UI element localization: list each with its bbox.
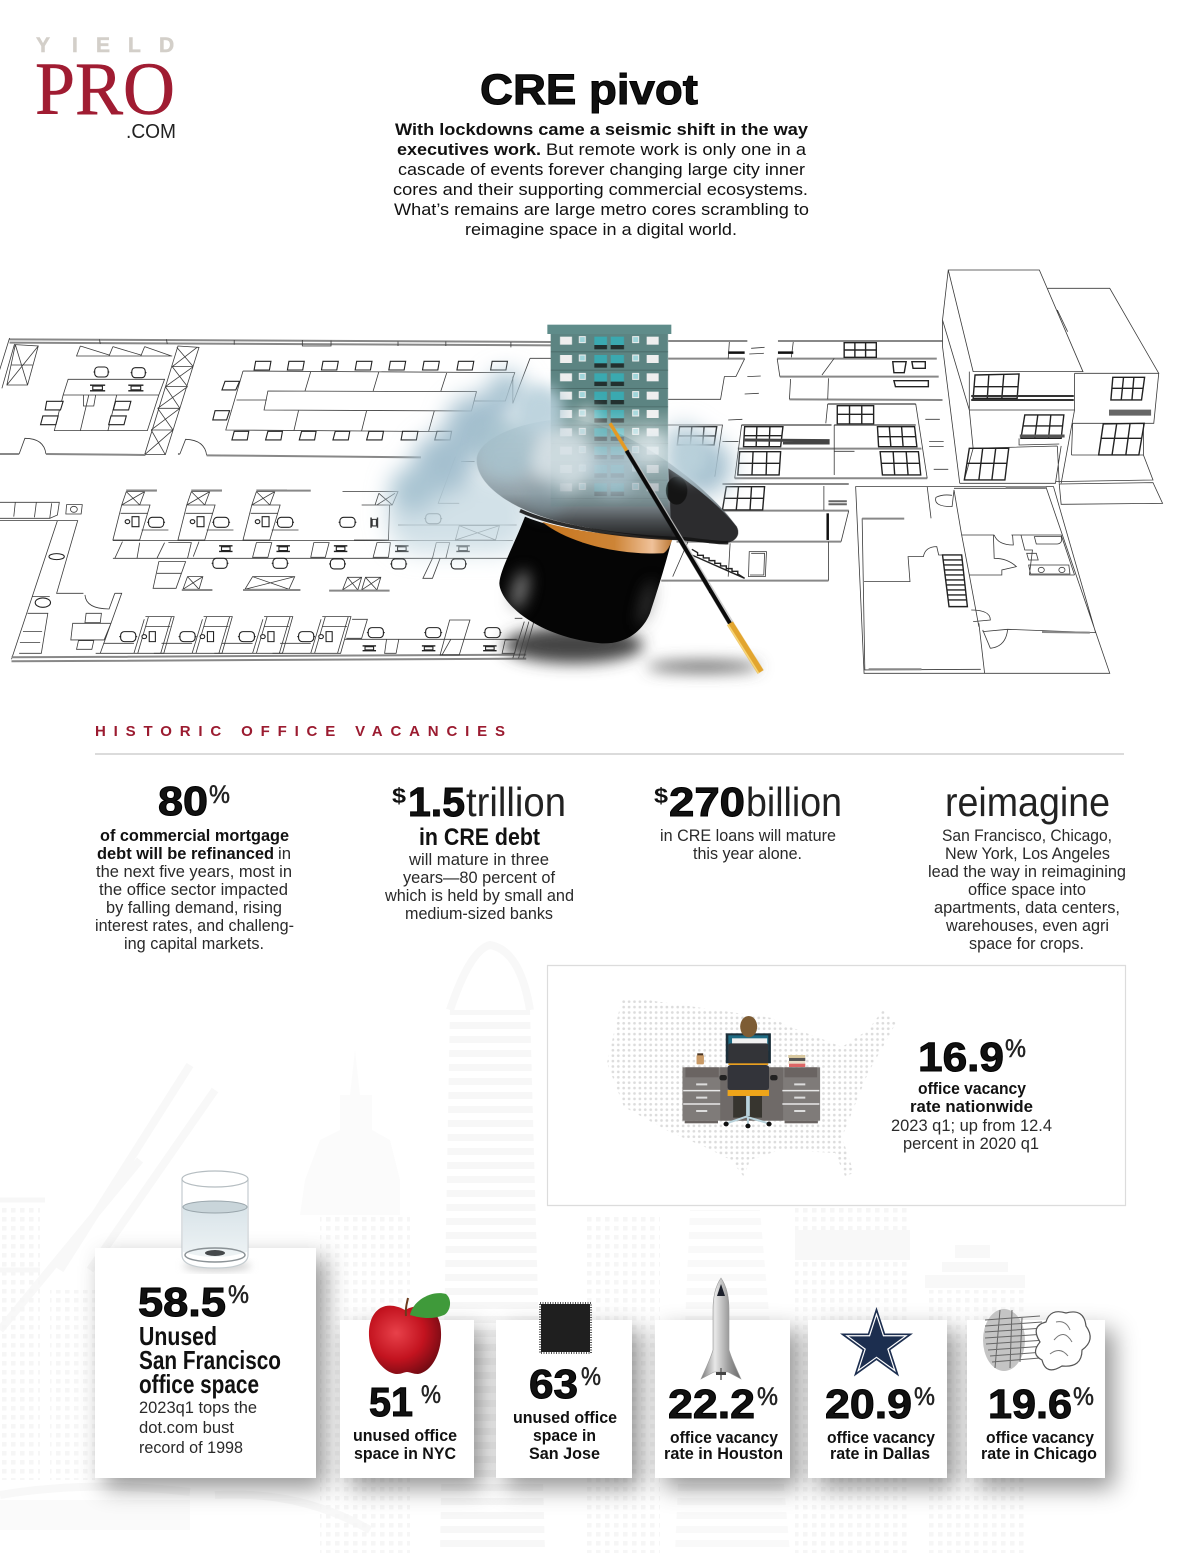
- card: San Francisco: office space: [139, 1369, 259, 1399]
- stat: $1.5 trillion: [384, 779, 574, 923]
- card: San Jose: [496, 1303, 632, 1478]
- stat: reimagine: office space into: [968, 880, 1086, 899]
- stat: reimagine: warehouses, even agri: [945, 916, 1109, 935]
- panel: national vacancy: [548, 966, 1126, 1206]
- card: Dallas: 20.9: [825, 1381, 912, 1427]
- lower office: [0, 502, 59, 518]
- stat: 80%: %: [209, 781, 230, 809]
- card: San Francisco: dot.com bust: [139, 1418, 234, 1437]
- building: [547, 325, 671, 507]
- card: Chicago: 19.6: [988, 1381, 1072, 1427]
- card: San Jose: 63: [529, 1361, 578, 1407]
- stat: $1.5 trillion: 1.5: [408, 779, 465, 825]
- card: Dallas: rate in Dallas: [830, 1444, 930, 1463]
- card: San Jose: San Jose: [529, 1444, 600, 1463]
- card: Houston: %: [757, 1383, 778, 1411]
- section heading: HISTORIC OFFICE VACANCIES: [95, 723, 505, 740]
- hat body: [499, 517, 673, 643]
- national figure: [891, 1034, 1052, 1153]
- card: San Francisco: record of 1998: [139, 1438, 243, 1457]
- title: CRE pivot: [480, 66, 698, 114]
- card: San Francisco: Unused: [139, 1321, 217, 1351]
- card: NYC: space in NYC: [354, 1444, 456, 1463]
- stat: $270 billion: 270: [669, 779, 745, 825]
- stat: 80%: ing capital markets.: [124, 934, 264, 953]
- stat: 80%: the next five years, most in: [96, 862, 292, 881]
- stat: $1.5 trillion: in CRE debt: [419, 824, 540, 851]
- card: San Jose: unused office: [513, 1408, 617, 1427]
- stat: 80%: in: [278, 844, 291, 863]
- illustration: magic hat: [387, 325, 761, 673]
- icon: microchip: [540, 1303, 591, 1353]
- logo: [35, 34, 176, 143]
- logo: PRO: PRO: [35, 48, 175, 131]
- card: San Jose: space in: [533, 1426, 596, 1445]
- hat ground shadows: [503, 627, 760, 672]
- card: NYC: [340, 1293, 474, 1478]
- floor plan: right house: [661, 270, 1163, 673]
- card: Chicago: [967, 1309, 1105, 1478]
- icon: star: [840, 1307, 913, 1376]
- card: Chicago: %: [1073, 1383, 1094, 1411]
- stat: $270 billion: in CRE loans will mature: [660, 826, 836, 845]
- icon: water glass: [182, 1171, 251, 1271]
- intro text: cores and their supporting commercial ecosystems.: [393, 181, 808, 199]
- intro text: cascade of events forever changing large city inner: [398, 161, 806, 179]
- rear cloud: [387, 372, 732, 553]
- national figure: %: [1005, 1035, 1026, 1063]
- intro text: [393, 121, 809, 239]
- icon: person at desk: [682, 1016, 820, 1128]
- stat: $270 billion: [654, 779, 842, 863]
- stat: reimagine: reimagine: [945, 779, 1110, 825]
- smoke: [477, 385, 710, 517]
- stat: $270 billion: this year alone.: [693, 844, 802, 863]
- card: San Francisco: [95, 1171, 316, 1478]
- stat: 80%: interest rates, and challeng-: [95, 916, 294, 935]
- wand: [610, 423, 761, 673]
- card: Chicago: rate in Chicago: [981, 1444, 1097, 1463]
- stat: 80%: of commercial mortgage: [100, 826, 289, 845]
- stat: $1.5 trillion: trillion: [466, 779, 566, 825]
- card: San Francisco: 2023q1 tops the: [139, 1398, 257, 1417]
- stat: $1.5 trillion: medium-sized banks: [405, 904, 553, 923]
- hat brim: [477, 419, 738, 543]
- card: Houston: office vacancy: [670, 1428, 778, 1447]
- logo: YIELD: YIELD: [36, 34, 174, 57]
- stat: reimagine: space for crops.: [969, 934, 1084, 953]
- stat: $270 billion: billion: [746, 779, 842, 825]
- icon: apple: [369, 1293, 450, 1374]
- hat band: [542, 522, 673, 554]
- brim lower edge: [520, 511, 728, 543]
- card: San Francisco: %: [228, 1281, 249, 1309]
- stat: $1.5 trillion: which is held by small and: [384, 886, 574, 905]
- national figure: office vacancy: [918, 1079, 1026, 1098]
- icon: wind face: [983, 1309, 1090, 1371]
- card: Houston: rate in Houston: [664, 1444, 783, 1463]
- intro text: With lockdowns came a seismic shift in the way: [395, 121, 809, 139]
- card: San Jose: %: [581, 1363, 601, 1391]
- stat: 80%: the office sector impacted: [99, 880, 288, 899]
- intro text: But remote work is only one in a: [546, 141, 807, 159]
- national figure: percent in 2020 q1: [903, 1134, 1039, 1153]
- intro text: executives work.: [397, 141, 541, 159]
- national figure: 2023 q1; up from 12.4: [891, 1116, 1052, 1135]
- stat: 80%: [95, 778, 294, 953]
- card: Dallas: %: [914, 1383, 935, 1411]
- stat: reimagine: [928, 779, 1126, 953]
- stat: 80%: 80: [158, 778, 208, 824]
- card: NYC: unused office: [353, 1426, 457, 1445]
- dotted US map: [607, 998, 896, 1177]
- house lower plan: [856, 487, 1110, 673]
- stat: reimagine: New York, Los Angeles: [945, 844, 1110, 863]
- card: NYC: 51: [369, 1379, 413, 1425]
- background skyline: [0, 945, 1025, 1553]
- national figure: rate nationwide: [910, 1097, 1033, 1116]
- stat: 80%: debt will be refinanced: [97, 844, 274, 863]
- hat highlights: [508, 569, 657, 627]
- stat: $1.5 trillion: years—80 percent of: [403, 868, 555, 887]
- card: NYC: %: [421, 1381, 441, 1409]
- stat: reimagine: apartments, data centers,: [934, 898, 1120, 917]
- icon: rocket: [701, 1278, 741, 1380]
- brim dark right: [668, 468, 738, 543]
- intro text: What’s remains are large metro cores scrambling to: [394, 201, 809, 219]
- stat: reimagine: San Francisco, Chicago,: [942, 826, 1112, 845]
- intro text: reimagine space in a digital world.: [465, 221, 737, 239]
- stat: 80%: by falling demand, rising: [106, 898, 282, 917]
- stat: $1.5 trillion: will mature in three: [408, 850, 549, 869]
- card: Chicago: office vacancy: [986, 1428, 1094, 1447]
- conference table: [213, 361, 515, 440]
- card: Houston: [655, 1278, 790, 1478]
- national figure: 16.9: [918, 1034, 1004, 1080]
- card: Dallas: [808, 1307, 947, 1478]
- floor plan: left office: [0, 338, 551, 661]
- card: Houston: 22.2: [668, 1381, 755, 1427]
- card: San Francisco: 58.5: [138, 1279, 226, 1325]
- logo: .COM: .COM: [126, 121, 176, 143]
- stat: reimagine: lead the way in reimagining: [928, 862, 1126, 881]
- house 3d building: [943, 270, 1163, 504]
- stat: $270 billion: $: [654, 785, 668, 808]
- card: San Francisco: San Francisco: [139, 1345, 281, 1375]
- card: Dallas: office vacancy: [827, 1428, 935, 1447]
- stat: $1.5 trillion: $: [392, 785, 406, 808]
